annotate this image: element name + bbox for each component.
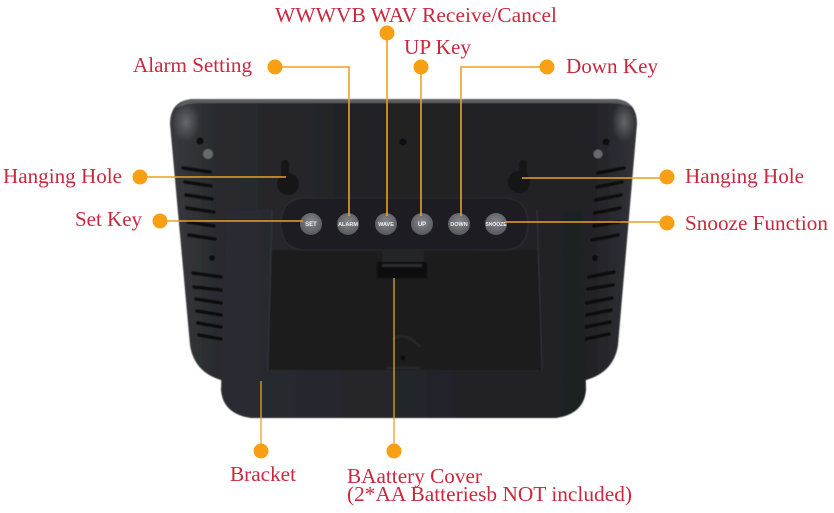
callout: UP Key: UP Key bbox=[404, 35, 471, 59]
left vents bbox=[183, 168, 221, 339]
button: SET bbox=[300, 213, 322, 235]
battery cover latch bbox=[377, 250, 427, 278]
callout: Snooze Function bbox=[505, 211, 828, 235]
callout: Set Key: Set Key bbox=[75, 207, 142, 231]
callout: Set Key bbox=[75, 207, 303, 231]
callout: Alarm Setting bbox=[133, 53, 349, 216]
screw holes bbox=[196, 138, 610, 261]
button: DOWN: DOWN bbox=[450, 222, 468, 228]
button: UP bbox=[411, 213, 433, 235]
callout: Alarm Setting: Alarm Setting bbox=[133, 53, 252, 77]
callout: Hanging Hole right: Hanging Hole bbox=[685, 164, 804, 188]
bracket bbox=[221, 210, 586, 418]
button: UP: UP bbox=[418, 222, 426, 228]
hanging hole left bbox=[277, 160, 299, 195]
callout: Hanging Hole right bbox=[522, 164, 804, 188]
device body bbox=[170, 99, 637, 380]
button: DOWN bbox=[448, 213, 470, 235]
callout: Bracket: Bracket bbox=[230, 462, 296, 486]
callout: Battery Cover: (2*AA Batteriesb NOT included) bbox=[347, 482, 632, 506]
callout: Battery Cover bbox=[347, 278, 632, 506]
hanging hole right bbox=[508, 160, 530, 193]
button: SET: SET bbox=[305, 222, 317, 228]
button: SNOOZE: SNOOZE bbox=[485, 222, 507, 228]
callout: WWWVB bbox=[275, 3, 557, 216]
button: WAVE bbox=[375, 213, 397, 235]
callout: Bracket bbox=[230, 381, 296, 486]
callout: Hanging Hole left: Hanging Hole bbox=[3, 164, 122, 188]
callout: UP Key bbox=[404, 35, 471, 216]
callout: Battery Cover: BAattery Cover bbox=[347, 464, 482, 488]
button panel bbox=[281, 198, 528, 278]
callout: WWWVB: WWWVB WAV Receive/Cancel bbox=[275, 3, 557, 27]
callout: Hanging Hole left bbox=[3, 164, 286, 188]
button: SNOOZE bbox=[485, 213, 507, 235]
callout: Snooze Function: Snooze Function bbox=[685, 211, 828, 235]
button: WAVE: WAVE bbox=[378, 222, 394, 228]
right vents bbox=[586, 168, 624, 339]
button: ALARM bbox=[337, 213, 359, 235]
callout: Down Key: Down Key bbox=[566, 54, 658, 78]
button: ALARM: ALARM bbox=[338, 222, 358, 228]
callout: Down Key bbox=[461, 54, 658, 216]
